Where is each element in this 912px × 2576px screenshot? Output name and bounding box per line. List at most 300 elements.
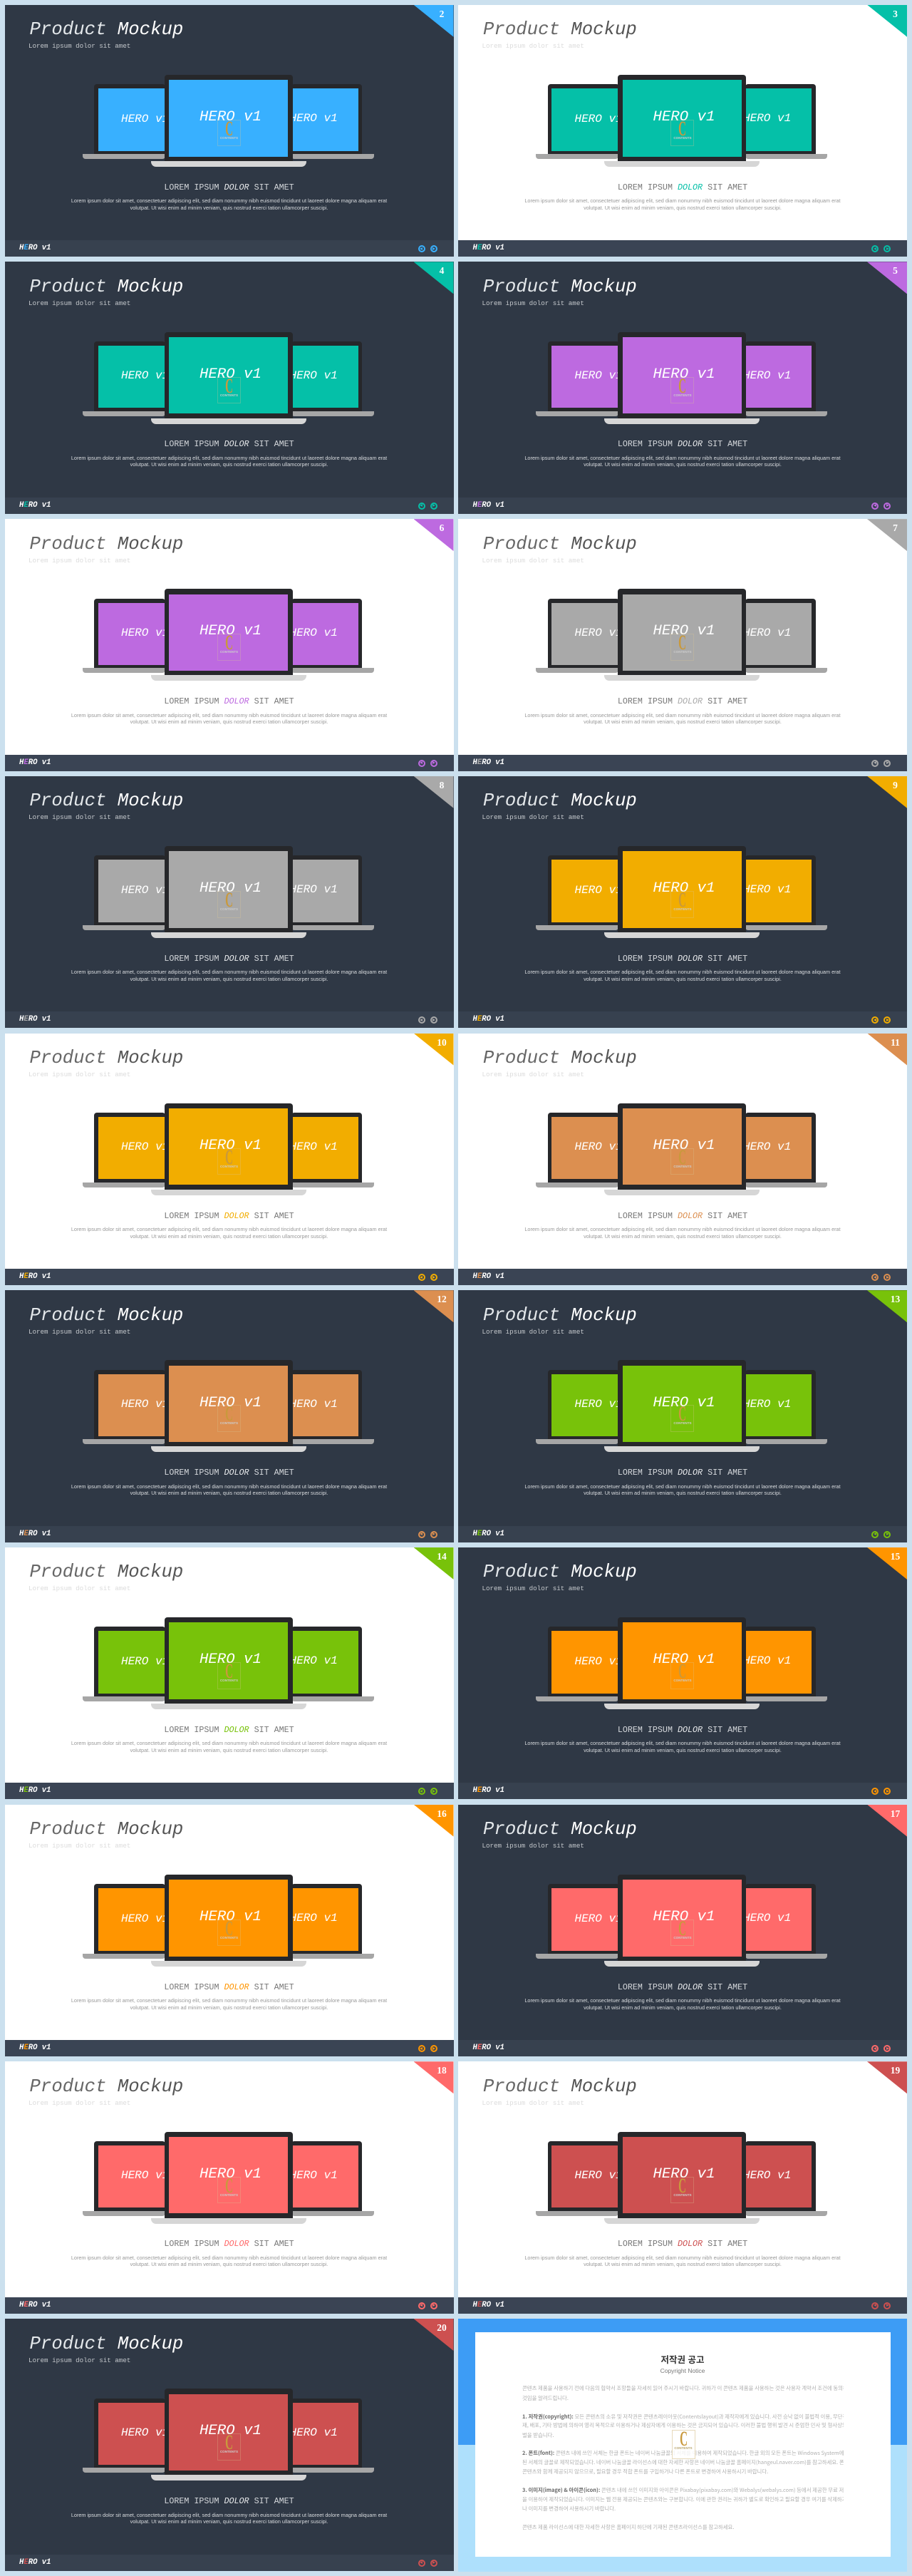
body text: Lorem ipsum dolor sit amet, consectetuer adipiscing elit, sed diam nonummy nibh euismod tincidunt ut laoreet dolore magna aliquam erat [71,1997,387,2004]
laptop mockups [83,75,374,167]
center laptop [604,1875,760,1967]
body text [458,1740,907,1753]
subtitle: Lorem ipsum dolor sit amet [28,2356,130,2364]
notice text: 콘텐츠 제품 라이선스에 대한 자세한 사항은 홈페이지 하단에 기재된 콘텐츠라이선스를 참고하세요. [522,2523,734,2531]
corner tag 7 [867,519,907,551]
center laptop: HERO v1 [200,366,261,383]
corner tag 10: 10 [437,1036,447,1048]
subtitle: Lorem ipsum dolor sit amet [482,42,584,50]
watermark logo: CONTENTS [220,1421,238,1425]
corner tag 18 [413,2061,453,2093]
title: Product Mockup [483,1819,637,1840]
center laptop [151,1617,306,1709]
panel: slide 3 [458,5,907,257]
watermark logo: C [225,117,233,140]
title: Product Mockup [483,534,637,555]
laptop mockups [536,1617,827,1709]
center laptop [604,2132,760,2224]
center laptop: HERO v1 [653,366,715,383]
center laptop [604,846,760,938]
corner tag 15: 15 [891,1551,900,1562]
watermark logo: CONTENTS [220,1936,238,1939]
left laptop [536,1113,618,1187]
notice text: 1. 저작권(copyright): 모든 콘텐츠의 소유 및 저작권은 콘텐츠레이아웃(Contentslayout)과 제작자에게 있습니다. 사전 승낙 없이 불법적 이용, 무단전 [522,2413,844,2421]
body text: Lorem ipsum dolor sit amet, consectetuer adipiscing elit, sed diam nonummy nibh euismod tincidunt ut laoreet dolore magna aliquam erat [524,1997,841,2004]
corner tag 13 [867,1290,907,1322]
corner tag 17: 17 [891,1808,900,1819]
notice text: 을 이용하여 제작되었습니다. 이미지는 웹 전용 제공되는 콘텐츠와는 구분합니다. 이에 관한 권리는 귀하가 별도로 확인하고 필요할 경우 여기를 삭제하거 [522,2495,844,2503]
body text [458,1483,907,1497]
watermark logo: CONTENTS [673,136,692,140]
center laptop [151,75,306,167]
watermark logo: CONTENTS [220,393,238,397]
body text: Lorem ipsum dolor sit amet, consectetuer adipiscing elit, sed diam nonummy nibh euismod tincidunt ut laoreet dolore magna aliquam erat [524,455,841,461]
corner tag 9 [867,776,907,808]
right laptop [291,599,374,673]
corner tag 6 [413,519,453,551]
center laptop: HERO v1 [200,109,261,125]
footer bar: HERO v1 [19,244,51,252]
body text: volutpat. Ut wisi enim ad minim veniam, quis nostrud exerci tation ullamcorper suscipi. [584,1490,782,1496]
body text: Lorem ipsum dolor sit amet, consectetuer adipiscing elit, sed diam nonummy nibh euismod tincidunt ut laoreet dolore magna aliquam erat [71,1483,387,1490]
right laptop [745,341,827,416]
watermark logo: C [225,1402,233,1426]
title: Product Mockup [30,2076,183,2097]
footer bar: HERO v1 [473,1786,504,1795]
heading: LOREM IPSUM DOLOR SIT AMET [618,2239,747,2249]
corner tag 12 [413,1290,453,1322]
watermark logo: CONTENTS [220,1679,238,1682]
left laptop [83,1884,165,1959]
corner tag 20: 20 [437,2322,447,2333]
watermark logo [670,634,694,661]
body text [4,2512,453,2525]
watermark logo: CONTENTS [673,2193,692,2197]
footer bar: HERO v1 [19,1786,51,1795]
right laptop [291,84,374,159]
footer bar: HERO v1 [19,1530,51,1538]
laptop mockups [83,1360,374,1452]
panel: slide 8 [4,776,453,1028]
laptop mockups [83,1617,374,1709]
panel: slide 2 [4,5,453,257]
notice text: 재, 배포, 기타 방법에 의하여 영리 목적으로 이용하거나 제삼자에게 이용하는 것은 금지되어 있습니다. 이러한 불법 행위 발견 시 준엄한 민사 및 형사상의 처 [522,2421,844,2429]
right laptop [745,2141,827,2216]
center laptop: HERO v1 [200,880,261,897]
left laptop [536,599,618,673]
title: Product Mockup [483,2076,637,2097]
body text: Lorem ipsum dolor sit amet, consectetuer adipiscing elit, sed diam nonummy nibh euismod tincidunt ut laoreet dolore magna aliquam erat [524,969,841,975]
corner tag 16 [413,1805,453,1837]
title: Product Mockup [30,2334,183,2354]
center laptop: HERO v1 [653,623,715,639]
notice text: 것임을 알려드립니다. [522,2394,569,2402]
panel: copyright notice [458,2319,907,2572]
center laptop: HERO v1 [653,109,715,125]
watermark logo [217,1662,241,1689]
center laptop [604,1103,760,1195]
center laptop [604,332,760,424]
footer bar: HERO v1 [19,1015,51,1024]
panel: slide 12 [4,1290,453,1542]
left laptop [83,2399,165,2473]
laptop mockups [83,2389,374,2480]
left laptop [536,1627,618,1701]
corner tag 14: 14 [437,1551,447,1562]
laptop mockups [83,332,374,424]
blue band [458,2319,907,2445]
heading: LOREM IPSUM DOLOR SIT AMET [164,1210,294,1220]
corner tag 5: 5 [893,265,898,276]
body text [524,455,841,468]
center laptop: HERO v1 [200,1395,261,1411]
footer bar: HERO v1 [473,501,504,510]
notice text: 콘텐츠 제품을 사용하기 전에 다음의 협약서 조항들을 자세히 읽어 주시기 바랍니다. 귀하가 이 콘텐츠 제품을 사용하는 것은 사용자 계약서 조건에 동의하는 [522,2384,844,2392]
laptop mockups [536,846,827,938]
watermark logo [217,2177,241,2203]
right laptop [745,1627,827,1701]
watermark logo [670,377,694,403]
watermark logo: CONTENTS [673,907,692,911]
heading: LOREM IPSUM DOLOR SIT AMET [164,439,294,449]
footer bar: HERO v1 [473,244,504,252]
left laptop [536,341,619,416]
corner tag 8 [413,776,453,808]
body text: Lorem ipsum dolor sit amet, consectetuer adipiscing elit, sed diam nonummy nibh euismod tincidunt ut laoreet dolore magna aliquam erat [524,1740,841,1746]
heading: LOREM IPSUM DOLOR SIT AMET [164,2496,294,2506]
title: Product Mockup [30,1305,183,1326]
watermark logo: CONTENTS [673,1165,692,1168]
subtitle: Lorem ipsum dolor sit amet [482,1071,584,1078]
left laptop [536,855,618,930]
heading: LOREM IPSUM DOLOR SIT AMET [164,182,294,192]
left laptop [83,1627,165,1701]
notice title: 저작권 공고 [661,2355,704,2365]
white notice card [475,2332,891,2557]
center laptop: HERO v1 [200,1138,261,1154]
title: Product Mockup [483,1305,637,1326]
center laptop: HERO v1 [653,1909,715,1925]
subtitle: Lorem ipsum dolor sit amet [482,1585,584,1592]
watermark logo [217,120,241,146]
subtitle: Lorem ipsum dolor sit amet [28,1071,130,1078]
laptop mockups [536,1360,827,1452]
title: Product Mockup [483,19,637,40]
watermark logo: C [679,631,686,654]
subtitle: Lorem ipsum dolor sit amet [482,1328,584,1336]
center laptop: HERO v1 [200,1909,261,1925]
notice text: 벌을 받습니다. [522,2431,554,2439]
heading: LOREM IPSUM DOLOR SIT AMET [164,1982,294,1992]
left laptop [83,1113,165,1187]
right laptop [291,1884,374,1959]
body text [458,712,907,726]
footer bar [4,240,453,257]
panel: slide 4 [4,262,453,514]
panel: slide 10 [4,1034,453,1285]
body text: Lorem ipsum dolor sit amet, consectetuer adipiscing elit, sed diam nonummy nibh euismod tincidunt ut laoreet dolore magna aliquam erat [71,969,387,975]
corner tag 20 [413,2319,453,2351]
watermark logo: CONTENTS [674,2446,693,2450]
corner tag 4 [413,262,453,294]
subtitle: Lorem ipsum dolor sit amet [28,2099,130,2107]
laptop mockups [536,332,827,424]
left laptop [536,1884,618,1959]
watermark logo: C [679,374,686,398]
body text [524,197,841,211]
watermark logo: C [225,2174,233,2198]
subtitle: Lorem ipsum dolor sit amet [482,1842,584,1850]
footer bar [4,755,453,771]
body text [4,1483,453,1497]
watermark logo [670,1662,694,1689]
footer bar [4,1783,453,1799]
heading: LOREM IPSUM DOLOR SIT AMET [618,1982,747,1992]
watermark logo [217,634,241,661]
body text: volutpat. Ut wisi enim ad minim veniam, quis nostrud exerci tation ullamcorper suscipi. [584,976,782,982]
body text [4,1226,453,1240]
watermark logo: C [679,2174,686,2198]
panel: slide 14 [4,1547,453,1799]
watermark logo: CONTENTS [673,1679,692,1682]
footer bar [458,2040,907,2056]
panel: slide 11 [458,1034,907,1285]
subtitle: Lorem ipsum dolor sit amet [482,2099,584,2107]
body text: volutpat. Ut wisi enim ad minim veniam, quis nostrud exerci tation ullamcorper suscipi. [130,2261,328,2267]
watermark logo: CONTENTS [220,907,238,911]
subtitle: Lorem ipsum dolor sit amet [482,557,584,565]
notice text: 나 이미지를 변경하여 사용하시기 바랍니다. [522,2505,616,2513]
body text: volutpat. Ut wisi enim ad minim veniam, quis nostrud exerci tation ullamcorper suscipi. [130,461,328,468]
left laptop [536,2141,618,2216]
heading: LOREM IPSUM DOLOR SIT AMET [164,1725,294,1735]
corner tag 12: 12 [437,1294,447,1304]
watermark logo: CONTENTS [220,650,238,654]
right laptop [745,1113,827,1187]
body text: volutpat. Ut wisi enim ad minim veniam, quis nostrud exerci tation ullamcorper suscipi. [130,1747,328,1753]
watermark logo: CONTENTS [673,1936,692,1939]
body text: volutpat. Ut wisi enim ad minim veniam, quis nostrud exerci tation ullamcorper suscipi. [584,1233,782,1239]
title: Product Mockup [30,790,183,811]
corner tag 2: 2 [440,9,444,19]
corner tag 11: 11 [891,1036,900,1048]
footer bar: HERO v1 [473,2044,504,2052]
watermark logo: CONTENTS [220,1165,238,1168]
body text: volutpat. Ut wisi enim ad minim veniam, quis nostrud exerci tation ullamcorper suscipi. [584,461,782,468]
right laptop [291,2141,374,2216]
center laptop [604,1617,760,1709]
watermark logo [670,120,694,146]
footer bar: HERO v1 [19,2044,51,2052]
subtitle: Lorem ipsum dolor sit amet [28,1842,130,1850]
footer bar [458,498,907,514]
footer bar: HERO v1 [19,1272,51,1281]
subtitle: Lorem ipsum dolor sit amet [28,557,130,565]
footer bar: HERO v1 [19,501,51,510]
watermark logo [217,2433,241,2461]
heading: LOREM IPSUM DOLOR SIT AMET [164,2239,294,2249]
body text: Lorem ipsum dolor sit amet, consectetuer adipiscing elit, sed diam nonummy nibh euismod tincidunt ut laoreet dolore magna aliquam erat [71,2255,387,2261]
subtitle: Lorem ipsum dolor sit amet [28,813,130,821]
body text: volutpat. Ut wisi enim ad minim veniam, quis nostrud exerci tation ullamcorper suscipi. [130,205,328,211]
title: Product Mockup [30,534,183,555]
corner tag 13: 13 [891,1294,900,1304]
body text [4,1997,453,2011]
footer bar [458,1011,907,1028]
body text: volutpat. Ut wisi enim ad minim veniam, quis nostrud exerci tation ullamcorper suscipi. [130,1490,328,1496]
corner tag 10 [413,1034,453,1065]
center laptop [151,589,306,681]
title: Product Mockup [30,277,183,297]
watermark logo [670,891,694,918]
body text: volutpat. Ut wisi enim ad minim veniam, quis nostrud exerci tation ullamcorper suscipi. [584,1747,782,1753]
body text: Lorem ipsum dolor sit amet, consectetuer adipiscing elit, sed diam nonummy nibh euismod tincidunt ut laoreet dolore magna aliquam erat [524,1226,841,1232]
right laptop [745,855,827,930]
title: Product Mockup [483,1562,637,1582]
title: Product Mockup [30,1562,183,1582]
corner tag 9: 9 [893,780,898,790]
footer bar [458,1526,907,1542]
title: Product Mockup [30,1819,183,1840]
left laptop [83,1370,165,1444]
watermark logo: C [225,2431,233,2454]
title: Product Mockup [30,19,183,40]
body text [458,1226,907,1240]
center laptop [151,846,306,938]
body text: volutpat. Ut wisi enim ad minim veniam, quis nostrud exerci tation ullamcorper suscipi. [130,2518,328,2525]
body text: volutpat. Ut wisi enim ad minim veniam, quis nostrud exerci tation ullamcorper suscipi. [130,2004,328,2011]
center laptop [151,2132,306,2224]
subtitle: Lorem ipsum dolor sit amet [28,42,130,50]
center laptop [151,332,306,424]
footer bar [458,1783,907,1799]
center laptop [604,75,760,167]
watermark logo [217,377,241,403]
subtitle: Lorem ipsum dolor sit amet [28,1328,130,1336]
right laptop [745,1370,827,1444]
subtitle: Lorem ipsum dolor sit amet [28,299,130,307]
subtitle: Lorem ipsum dolor sit amet [482,299,584,307]
panel: slide 5 [458,262,907,514]
heading: LOREM IPSUM DOLOR SIT AMET [164,1468,294,1478]
watermark logo: C [225,631,233,654]
body text: volutpat. Ut wisi enim ad minim veniam, quis nostrud exerci tation ullamcorper suscipi. [584,205,782,211]
heading: LOREM IPSUM DOLOR SIT AMET [618,1725,747,1735]
watermark logo: C [679,888,686,912]
laptop mockups [83,1875,374,1967]
center laptop: HERO v1 [200,2166,261,2183]
center laptop: HERO v1 [653,1652,715,1668]
heading: LOREM IPSUM DOLOR SIT AMET [618,439,747,449]
heading: LOREM IPSUM DOLOR SIT AMET [618,954,747,964]
title: Product Mockup [483,277,637,297]
corner tag 19: 19 [891,2065,900,2076]
corner tag 7: 7 [893,522,898,533]
notice text: 3. 이미지(image) & 아이콘(icon): 콘텐츠 내에 쓰인 이미지와 아이콘은 Pixabay(pixabay.com)와 Webalys(webalys.com) 등에서 제공한 무료 저작물 [522,2486,844,2494]
right laptop [291,855,374,930]
right laptop [745,84,827,159]
watermark logo [217,891,241,918]
watermark logo [217,1405,241,1432]
center laptop [151,1360,306,1452]
watermark logo [670,2177,694,2203]
watermark logo: C [680,2427,687,2451]
center laptop: HERO v1 [653,880,715,897]
corner tag 14 [413,1547,453,1580]
right laptop [291,1370,374,1444]
watermark logo: C [679,1145,686,1169]
heading: LOREM IPSUM DOLOR SIT AMET [618,1468,747,1478]
center laptop [151,1103,306,1195]
footer bar: HERO v1 [19,2557,51,2566]
left laptop [536,1370,618,1444]
watermark logo: C [225,1145,233,1169]
body text: volutpat. Ut wisi enim ad minim veniam, quis nostrud exerci tation ullamcorper suscipi. [130,976,328,982]
panel: slide 20 [4,2319,453,2570]
body text: Lorem ipsum dolor sit amet, consectetuer adipiscing elit, sed diam nonummy nibh euismod tincidunt ut laoreet dolore magna aliquam erat [71,1740,387,1746]
footer bar: HERO v1 [473,1530,504,1538]
body text [4,969,453,982]
body text: Lorem ipsum dolor sit amet, consectetuer adipiscing elit, sed diam nonummy nibh euismod tincidunt ut laoreet dolore magna aliquam erat [71,2512,387,2518]
watermark logo: C [225,888,233,912]
left laptop [83,84,165,159]
footer bar [4,2040,453,2056]
body text: Lorem ipsum dolor sit amet, consectetuer adipiscing elit, sed diam nonummy nibh euismod tincidunt ut laoreet dolore magna aliquam erat [71,455,387,461]
body text [458,2255,907,2268]
corner tag 3: 3 [893,9,898,19]
panel: slide 15 [458,1547,907,1799]
watermark logo: CONTENTS [220,2193,238,2197]
laptop mockups [536,1875,827,1967]
watermark logo [670,1405,694,1432]
footer bar: HERO v1 [19,2301,51,2309]
body text [71,455,388,468]
center laptop [604,589,760,681]
body text [71,197,388,211]
right laptop [291,1113,374,1187]
title: Product Mockup [483,790,637,811]
heading: LOREM IPSUM DOLOR SIT AMET [164,954,294,964]
body text [4,2255,453,2268]
watermark logo [670,1148,694,1175]
body text [4,1740,453,1753]
watermark logo: C [679,1917,686,1940]
center laptop: HERO v1 [653,1138,715,1154]
body text [458,1997,907,2011]
watermark logo: CONTENTS [220,136,238,140]
notice subtitle: Copyright Notice [660,2367,705,2374]
left laptop [83,855,165,930]
footer bar [4,1011,453,1028]
panel: slide 6 [4,519,453,771]
laptop mockups [83,589,374,681]
subtitle: Lorem ipsum dolor sit amet [482,813,584,821]
right laptop [291,341,374,416]
body text [458,969,907,982]
footer bar: HERO v1 [473,2301,504,2309]
panel: slide 17 [458,1805,907,2056]
body text: volutpat. Ut wisi enim ad minim veniam, quis nostrud exerci tation ullamcorper suscipi. [584,2261,782,2267]
footer bar [4,498,453,514]
body text: Lorem ipsum dolor sit amet, consectetuer adipiscing elit, sed diam nonummy nibh euismod tincidunt ut laoreet dolore magna aliquam erat [524,1483,841,1490]
corner tag 17 [867,1805,907,1837]
corner tag 15 [867,1547,907,1580]
body text: Lorem ipsum dolor sit amet, consectetuer adipiscing elit, sed diam nonummy nibh euismod tincidunt ut laoreet dolore magna aliquam erat [71,712,387,718]
laptop mockups [83,1103,374,1195]
footer bar [4,1269,453,1285]
corner tag 11 [867,1034,907,1065]
body text: Lorem ipsum dolor sit amet, consectetuer adipiscing elit, sed diam nonummy nibh euismod tincidunt ut laoreet dolore magna aliquam erat [524,197,841,204]
